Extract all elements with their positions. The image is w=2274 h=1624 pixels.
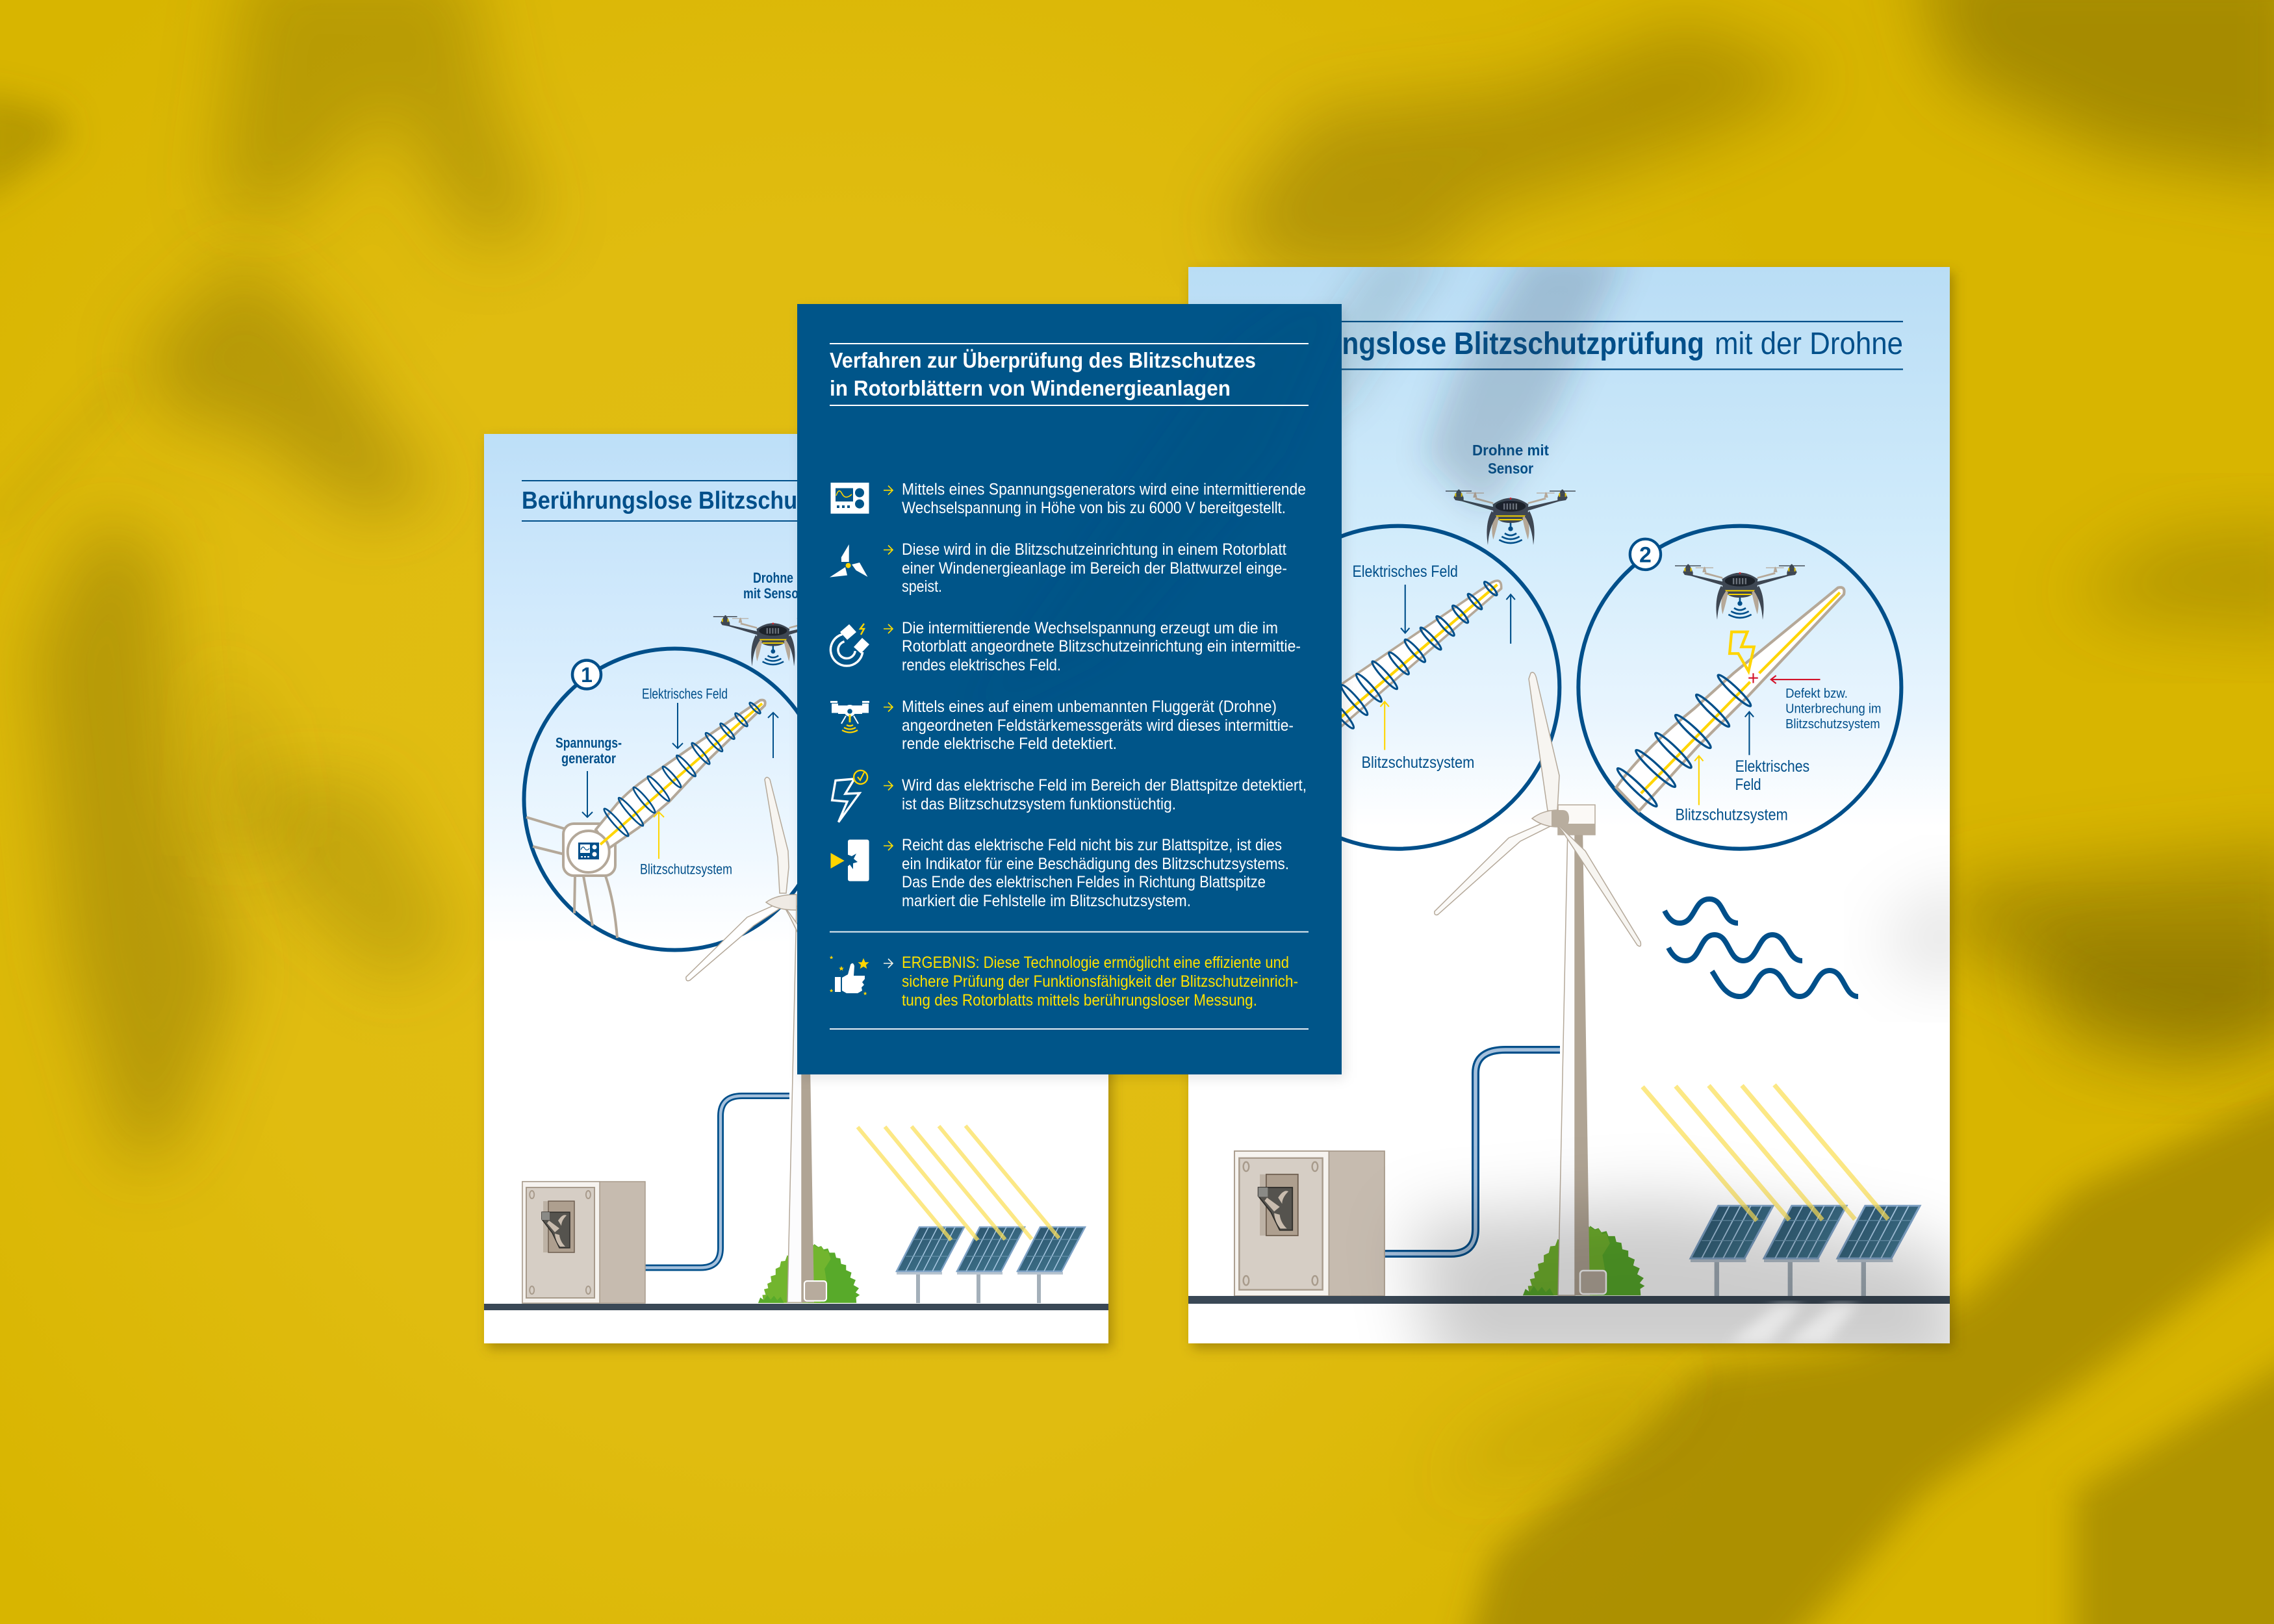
icon: drone with sensor [830,701,869,733]
circle detail: electric field along blade: Elektrisches Feld [1353,563,1458,581]
step 2: Diese wird in die Blitzschutzeinrichtung in einem Rotorblatt [902,540,1286,559]
result rules [830,932,1309,1029]
step 3: Rotorblatt angeordnete Blitzschutzeinrichtung ein intermittie- [902,637,1301,655]
circle detail 2: defect on blade [1578,526,1901,849]
defect marker [1748,673,1820,683]
cable right [1385,1050,1560,1254]
result: sichere Prüfung der Funktionsfähigkeit der Blitzschutzeinrich- [902,972,1298,991]
step 6: ein Indikator für eine Beschädigung des Blitzschutzsystems. [902,855,1289,873]
step 3: Die intermittierende Wechselspannung erzeugt um die im [902,619,1278,637]
defect label [1785,687,1881,731]
icon: solar panels right [1642,1085,1920,1296]
result: tung des Rotorblatts mittels berührungsloser Messung. [902,991,1257,1009]
electric field label [1735,712,1809,794]
step 1: Mittels eines Spannungsgenerators wird eine intermittierende [902,481,1306,499]
label: electric field: Elektrisches Feld [642,686,728,702]
step 5: ist das Blitzschutzsystem funktionstüchtig. [902,795,1176,813]
result: ERGEBNIS: Diese Technologie ermöglicht eine effiziente und [902,954,1289,972]
badge 1 [572,660,601,689]
right poster [1188,250,1975,1377]
step 6: Reicht das elektrische Feld nicht bis zur Blattspitze, ist dies [902,836,1282,854]
step 5: Wird das elektrische Feld im Bereich der Blattspitze detektiert, [902,776,1307,794]
system label: Blitzschutzsystem [1675,806,1788,824]
leaf shadows over right poster [1267,250,1975,1377]
left poster [484,434,1108,1343]
blade with conductor [1616,587,1844,811]
step 1: Wechselspannung in Höhe von bis zu 6000 V bereitgestellt. [902,499,1286,517]
drone label right: Sensor [1488,460,1533,477]
label: voltage generator [556,735,622,817]
drone label left [743,570,803,602]
icon: wind waves [1665,899,1858,996]
icon: bush left [758,1244,860,1303]
drone label left: mit Sensor [743,585,803,602]
step 6: Das Ende des elektrischen Feldes in Richtung Blattspitze [902,873,1266,891]
result [830,954,1298,1009]
label: lightning protection system [640,812,732,877]
badge 1: 1 [581,663,593,687]
icon: wind turbine [830,544,867,577]
icon: switch box right [1234,1151,1385,1296]
cable left [645,1096,789,1268]
ground left [484,1304,1108,1310]
icon: drone right [1446,489,1576,545]
junction box right [1580,1271,1606,1294]
step 3 [834,619,1301,674]
electric field label: Elektrisches [1735,758,1809,776]
panel title: in Rotorblättern von Windenergieanlagen [830,376,1231,400]
step 2 [830,540,1287,596]
wind turbine right [1435,672,1641,1295]
lightning bolt [1730,632,1754,671]
panel title [830,344,1309,405]
icon: switch box left [522,1182,645,1303]
left poster title [522,481,1098,521]
drone label right [1472,442,1549,477]
panel title: Verfahren zur Überprüfung des Blitzschutzes [830,348,1256,372]
icon: voltage generator [830,483,869,514]
defect label: Defekt bzw. [1785,687,1848,701]
step 2: einer Windenergieanlage im Bereich der Blattwurzel einge- [902,559,1287,577]
circle detail: electric field along blade: Blitzschutzsystem [1361,754,1474,772]
label: lightning protection system: Blitzschutzsystem [640,861,732,877]
left poster title: Berührungslose Blitzschutzprüfung [522,487,900,514]
step 1 [830,481,1306,517]
electric field label: Feld [1735,776,1761,794]
central info panel [797,304,1342,1074]
electric field rings [1615,672,1753,809]
right poster title [1234,322,1903,369]
junction box left [804,1281,826,1301]
right poster background [1188,267,1950,1343]
voltage generator icon [578,843,599,859]
icon: bush right [1523,1226,1644,1295]
electric field rings [602,702,761,838]
defect label: Unterbrechung im [1785,702,1881,717]
badge 2 [1630,539,1661,570]
circle detail: electric field along blade [1236,526,1559,849]
step 2: speist. [902,577,942,596]
defect label: Blitzschutzsystem [1785,717,1880,731]
shadow of cards [488,272,1954,1349]
shadow of central panel [800,308,1345,1078]
icon: lightning bolt with check [832,770,867,822]
step 3: rendes elektrisches Feld. [902,656,1061,674]
label: voltage generator: generator [561,750,616,767]
icon: drone left [713,615,833,666]
system label [1675,756,1788,824]
rotor hub with blades [526,700,765,938]
step 4: Mittels eines auf einem unbemannten Fluggerät (Drohne) [902,698,1277,716]
step 4: rende elektrische Feld detektiert. [902,735,1117,753]
circle detail 1: generator and blade [524,648,825,950]
icon: magnet [834,624,869,662]
icon: solar panels left [858,1126,1085,1303]
label: electric field [642,686,778,758]
drone label right: Drohne mit [1472,442,1549,459]
left poster background [484,434,1108,1343]
icon: thumbs up with stars [830,956,869,995]
icon: damaged conductor [830,839,869,881]
step 4 [830,698,1294,753]
label: voltage generator: Spannungs- [556,735,622,751]
right poster title: Berührungslose Blitzschutzprüfung [1234,327,1704,361]
badge 2: 2 [1639,542,1652,567]
right poster title: mit der Drohne [1715,327,1903,361]
step 6 [830,836,1289,910]
ground right [1188,1296,1950,1304]
step 4: angeordneten Feldstärkemessgeräts wird dieses intermittie- [902,717,1294,735]
drone label left: Drohne [753,570,793,586]
icon: drone in circle 2 [1675,564,1805,620]
step 5 [832,770,1307,822]
lightning protection conductor [600,704,762,844]
step 6: markiert die Fehlstelle im Blitzschutzsystem. [902,892,1191,910]
wind turbine left [686,777,814,1302]
